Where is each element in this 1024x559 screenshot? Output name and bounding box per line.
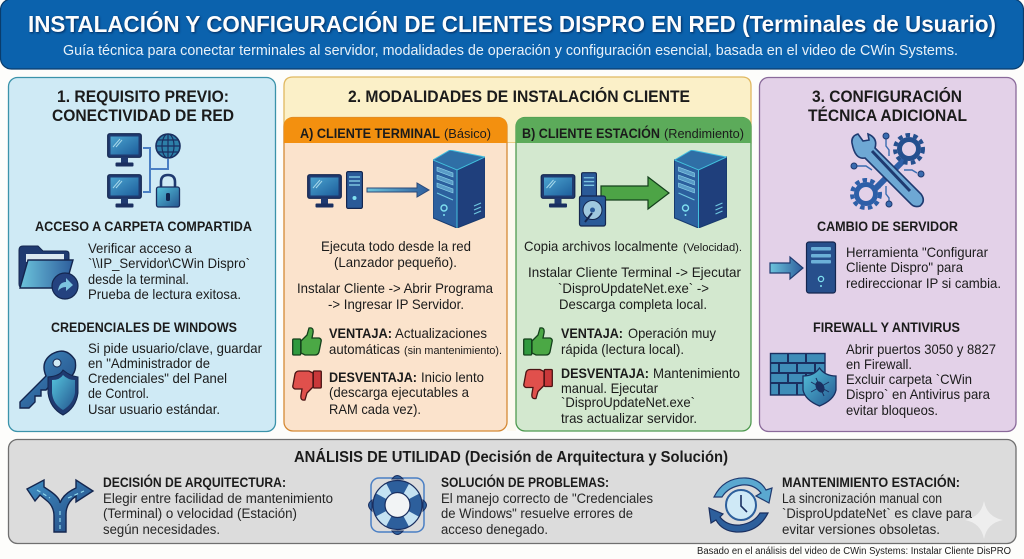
text: desventaja B — [561, 365, 740, 426]
text: ventaja A: Actualizaciones — [395, 325, 487, 341]
text: desventaja A: (descarga ejecutables a — [329, 384, 469, 400]
icon: sync clock — [709, 478, 772, 532]
text: decision — [103, 475, 333, 537]
text: ventaja B: Operación muy — [628, 325, 716, 341]
text: desventaja B: tras actualizar servidor. — [561, 410, 697, 426]
icon: sparkle — [965, 501, 1003, 539]
text: solucion — [441, 475, 653, 537]
text: descripcion B: Copia archivos localmente — [524, 238, 678, 254]
text: carpeta: Verificar acceso a — [88, 240, 192, 256]
text: cambio de servidor — [846, 244, 1001, 291]
icon: thumbs up A — [293, 328, 321, 355]
text: desventaja B: DESVENTAJA: — [561, 366, 649, 381]
text: ventaja A: VENTAJA: — [329, 326, 392, 341]
subtitle: Guía técnica para conectar terminales al servidor, modalidades de operación y configuración esencial, basada en el video de CWin Systems. — [63, 43, 958, 59]
text: carpeta — [88, 240, 250, 302]
icon: lifebuoy — [368, 476, 426, 534]
heading: panel 3: 3. CONFIGURACIÓN — [812, 87, 962, 106]
text: desventaja A: RAM cada vez). — [329, 401, 421, 417]
text: ventaja B — [561, 325, 716, 357]
text: decision: Elegir entre facilidad de mantenimiento — [103, 491, 333, 506]
text: ventaja A: (sin mantenimiento). — [404, 345, 502, 357]
heading: panel 3: TÉCNICA ADICIONAL — [808, 106, 967, 125]
subheading: cambio de servidor: CAMBIO DE SERVIDOR — [817, 219, 958, 234]
text: solucion: El manejo correcto de "Credenciales — [441, 491, 653, 506]
text: mantenimiento: MANTENIMIENTO ESTACIÓN: — [782, 475, 960, 490]
heading: panel 1: CONECTIVIDAD DE RED — [52, 107, 234, 125]
text: descripcion A: (Lanzador pequeño). — [334, 254, 457, 270]
text: descripcion B — [524, 238, 742, 312]
icon: thumbs down B — [524, 370, 552, 399]
text: solucion: acceso denegado. — [441, 522, 548, 537]
text: ventaja B: VENTAJA: — [561, 326, 623, 341]
text: cambio de servidor: Herramienta "Configurar — [846, 244, 988, 260]
icon: arrow into server — [770, 242, 836, 293]
icon: terminal to server — [308, 150, 485, 228]
icon: key and shield — [20, 351, 78, 415]
footer credit: Basado en el análisis del video de CWin Systems: Instalar Cliente DisPRO — [697, 546, 1011, 557]
text: descripcion B: Descarga completa local. — [559, 296, 707, 312]
text: desventaja A: DESVENTAJA: — [329, 370, 417, 385]
text: desventaja A: Inicio lento — [421, 369, 484, 385]
text: desventaja A — [329, 369, 484, 417]
text: credenciales: de Control. — [88, 385, 149, 401]
panel: analisis de utilidad — [8, 440, 1016, 544]
subpanel header A: (Básico) — [444, 126, 491, 141]
text: descripcion A: -> Ingresar IP Servidor. — [328, 296, 464, 312]
icon: station to server — [541, 150, 726, 228]
text: credenciales: Usar usuario estándar. — [88, 401, 220, 417]
text: solucion: de Windows" resuelve errores de — [441, 506, 633, 521]
text: mantenimiento — [782, 475, 972, 537]
text: mantenimiento: La sincronización manual con — [782, 491, 942, 506]
subpanel header A — [284, 118, 507, 143]
subheading: firewall: FIREWALL Y ANTIVIRUS — [813, 320, 960, 335]
text: descripcion B: (Velocidad). — [683, 242, 742, 254]
subpanel header B — [516, 118, 751, 143]
subpanel: cliente estacion — [516, 118, 751, 431]
text: solucion: SOLUCIÓN DE PROBLEMAS: — [441, 475, 609, 490]
text: descripcion A: Ejecuta todo desde la red — [321, 238, 471, 254]
text: credenciales: Credenciales" del Panel — [88, 370, 227, 386]
heading: panel 3 — [808, 87, 967, 125]
panel: modalidades — [284, 77, 751, 431]
text: firewall: en Firewall. — [846, 356, 912, 372]
subpanel header B: (Rendimiento) — [664, 126, 744, 141]
icon: thumbs up B — [524, 328, 552, 355]
icon: firewall and shield — [770, 354, 836, 406]
heading: panel 1 — [52, 88, 234, 125]
text: credenciales: en "Administrador de — [88, 355, 210, 371]
text: carpeta: `\\IP_Servidor\CWin Dispro` — [88, 255, 250, 271]
subpanel header A: A) CLIENTE TERMINAL — [300, 125, 440, 141]
text: firewall — [846, 341, 996, 418]
text: mantenimiento: `DisproUpdateNet` es clave para — [782, 506, 972, 521]
text: decision: DECISIÓN DE ARQUITECTURA: — [103, 475, 286, 490]
icon: tools — [851, 133, 924, 208]
subpanel: cliente terminal — [284, 118, 507, 431]
icon: thumbs down A — [293, 371, 321, 400]
title: INSTALACIÓN Y CONFIGURACIÓN DE CLIENTES DISPRO EN RED (Terminales de Usuario) — [28, 10, 996, 37]
heading: panel 2: 2. MODALIDADES DE INSTALACIÓN CLIENTE — [348, 87, 690, 106]
text: firewall: Dispro` en Antivirus para — [846, 386, 990, 402]
text: ventaja A — [329, 325, 502, 357]
text: descripcion A: Instalar Cliente -> Abrir Programa — [297, 280, 493, 296]
subpanel header B: B) CLIENTE ESTACIÓN — [522, 124, 660, 141]
text: descripcion B: `DisproUpdateNet.exe` -> — [558, 280, 709, 296]
icon: folder — [19, 246, 78, 299]
text: decision: (Terminal) o velocidad (Estación) — [103, 506, 297, 521]
icon: network — [108, 134, 180, 208]
text: firewall: evitar bloqueos. — [846, 402, 938, 418]
icon: fork arrows — [27, 480, 93, 532]
text: desventaja B: manual. Ejecutar — [561, 380, 658, 396]
text: firewall: Excluir carpeta `CWin — [846, 371, 972, 387]
text: cambio de servidor: redireccionar IP si cambia. — [846, 275, 1001, 291]
heading: analisis: ANÁLISIS DE UTILIDAD (Decisión de Arquitectura y Solución) — [294, 447, 728, 466]
panel: requisito previo — [8, 78, 276, 432]
text: carpeta: Prueba de lectura exitosa. — [88, 286, 241, 302]
text: credenciales — [88, 340, 262, 417]
text: desventaja B: Mantenimiento — [653, 365, 740, 381]
header banner — [0, 0, 1024, 69]
text: mantenimiento: evitar versiones obsoletas. — [782, 522, 940, 537]
text: firewall: Abrir puertos 3050 y 8827 — [846, 341, 996, 357]
text: desventaja B: `DisproUpdateNet.exe` — [561, 394, 695, 410]
text: descripcion A — [297, 238, 493, 312]
text: carpeta: desde la terminal. — [88, 271, 189, 287]
panel: configuracion tecnica — [760, 78, 1016, 432]
text: ventaja B: rápida (lectura local). — [561, 341, 684, 357]
subheading: carpeta: ACCESO A CARPETA COMPARTIDA — [35, 219, 252, 234]
heading: panel 1: 1. REQUISITO PREVIO: — [57, 88, 229, 106]
text: cambio de servidor: Cliente Dispro" para — [846, 259, 963, 275]
text: ventaja A: automáticas — [329, 341, 400, 357]
subheading: credenciales: CREDENCIALES DE WINDOWS — [51, 320, 237, 335]
text: credenciales: Si pide usuario/clave, guardar — [88, 340, 262, 356]
text: descripcion B: Instalar Cliente Terminal -> Ejecutar — [528, 264, 741, 280]
text: decision: según necesidades. — [103, 522, 220, 537]
